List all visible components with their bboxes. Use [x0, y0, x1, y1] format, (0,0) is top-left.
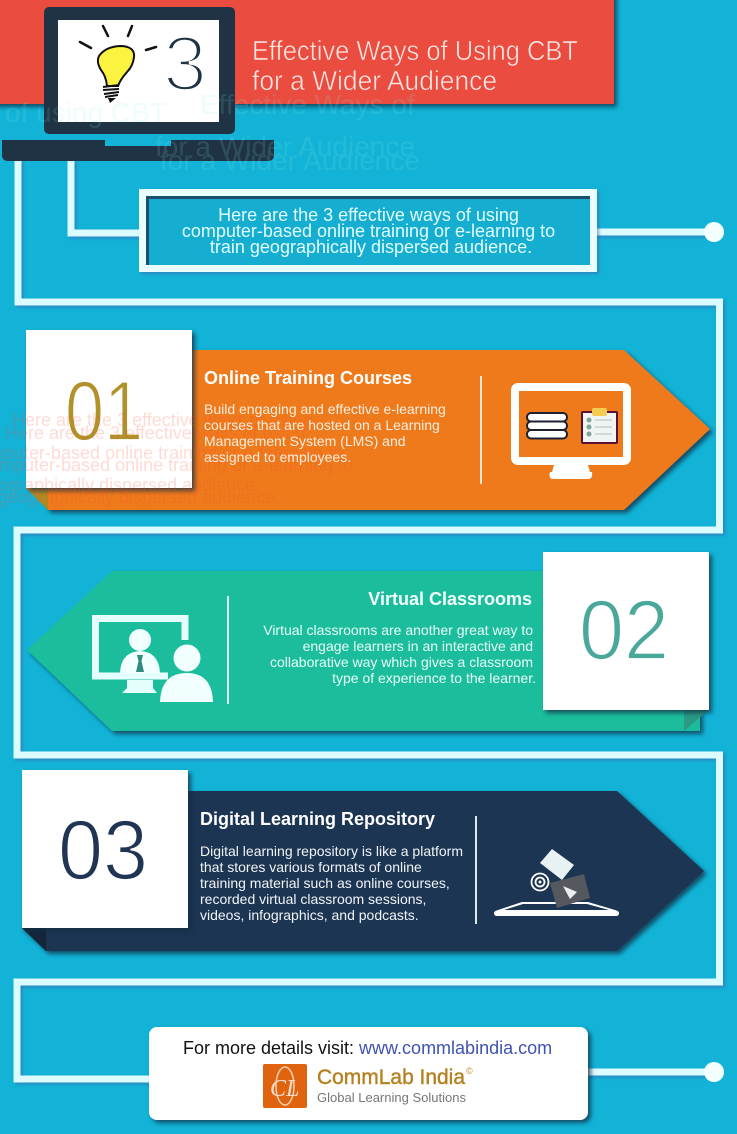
body text: Digital learning repository is like a platform — [200, 843, 463, 859]
intro text: Here are the 3 effective ways of using — [218, 205, 519, 225]
body text: Virtual classrooms are another great way to — [263, 622, 533, 638]
title: Effective Ways of Using CBT — [252, 35, 578, 66]
body text: that stores various formats of online — [200, 859, 422, 875]
title: for a Wider Audience — [252, 65, 497, 96]
body text: assigned to employees. — [204, 449, 351, 465]
heading: Digital Learning Repository — [200, 809, 435, 829]
body text: videos, infographics, and podcasts. — [200, 907, 419, 923]
panel: virtual classrooms — [27, 552, 709, 731]
panel: digital learning repository — [22, 770, 704, 951]
number square 02 — [543, 552, 709, 710]
connector end dots — [704, 222, 724, 1082]
heading: Online Training Courses — [204, 368, 412, 388]
intro text: train geographically dispersed audience. — [210, 237, 532, 257]
body text: training material such as online courses, — [200, 875, 450, 891]
CommLab India logo: Global Learning Solutions — [317, 1090, 466, 1105]
ghost text over first panel: Here are the 3 effective ways of using — [5, 423, 306, 443]
body text: Management System (LMS) and — [204, 433, 406, 449]
number square 03: 03 — [58, 803, 148, 897]
body text: recorded virtual classroom sessions, — [200, 891, 426, 907]
footer card — [149, 1027, 588, 1120]
heading: Virtual Classrooms — [368, 589, 532, 609]
ghost text over header — [5, 89, 420, 176]
CommLab India logo: CL — [270, 1076, 299, 1102]
body text: collaborative way which gives a classroom — [270, 654, 533, 670]
CommLab India logo — [263, 1064, 473, 1108]
header banner — [0, 0, 614, 104]
intro box — [142, 192, 594, 268]
icon: light bulb — [80, 26, 156, 103]
icon: monitor with books and clipboard — [515, 387, 627, 479]
body text: type of experience to the learner. — [332, 670, 536, 686]
connector lines — [17, 160, 720, 1079]
body text: courses that are hosted on a Learning — [204, 417, 440, 433]
icon: virtual presenter and learner — [96, 618, 213, 702]
number square 02: 02 — [579, 583, 669, 677]
ghost text over first panel: Here are the 3 effective ways of using — [12, 410, 313, 430]
number square 01: 01 — [65, 364, 143, 458]
ghost text over header: for a Wider Audience — [155, 131, 415, 162]
footer link text: For more details visit: www.commlabindia.com — [183, 1038, 552, 1058]
CommLab India logo: © — [466, 1066, 473, 1076]
ghost text over header: for a Wider Audience — [160, 145, 420, 176]
number square 03 — [22, 770, 188, 928]
icon: tablet with book, target and video — [494, 849, 619, 916]
ghost text over header: of using CBT — [5, 97, 167, 128]
intro text: computer-based online training or e-learning to — [182, 221, 555, 241]
numeral 3: 3 — [163, 19, 207, 107]
number square 01 — [26, 330, 192, 488]
body text: Build engaging and effective e-learning — [204, 401, 446, 417]
panel: online training courses — [0, 330, 710, 510]
body text: engage learners in an interactive and — [303, 638, 533, 654]
CommLab India logo: CommLab India — [317, 1066, 465, 1089]
laptop icon — [2, 7, 274, 161]
ghost text over header: Effective Ways of — [200, 89, 415, 120]
ghost text over first panel — [0, 410, 353, 507]
